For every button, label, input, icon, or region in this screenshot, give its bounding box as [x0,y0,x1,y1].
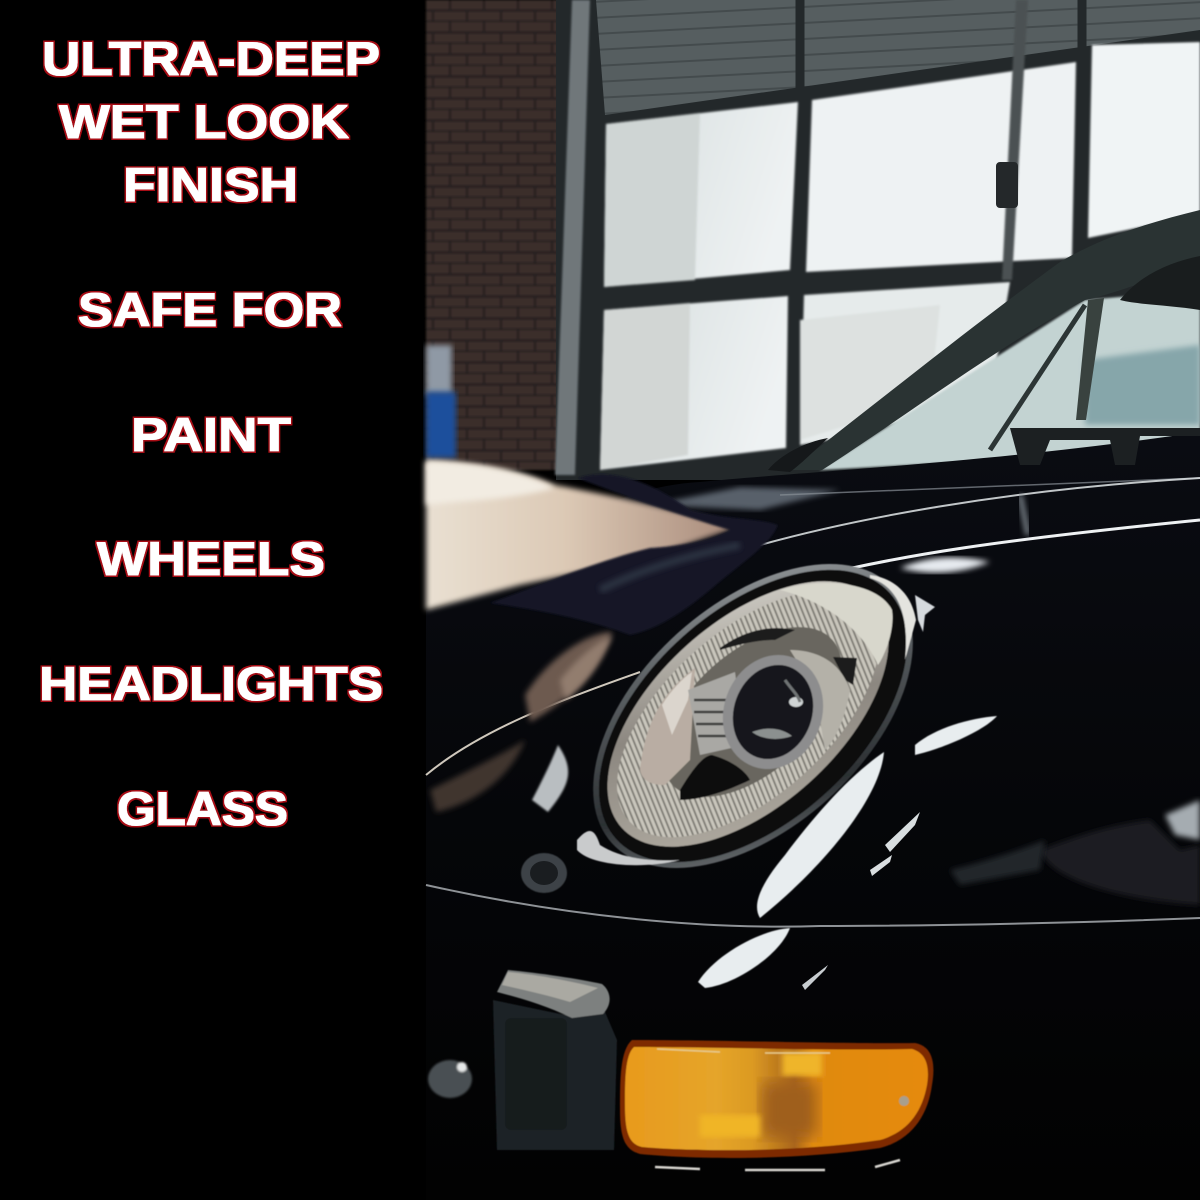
photo: windshield and roof [768,210,1200,472]
brick wall [426,0,566,470]
side marker round cap [521,853,567,893]
dark wedges [720,628,795,650]
dark recess under lens [680,755,750,800]
icon: headlight [537,506,969,926]
heading: ultra-deep wet look finish [42,32,380,211]
text: paint: PAINT [131,408,291,461]
large white streak [757,752,884,918]
left chrome [640,668,695,785]
projector lens [707,641,839,783]
photo: paint reflections [426,478,1200,990]
door mirror base [768,438,828,472]
photo: garage background [426,0,1200,480]
vertical pole [1002,0,1028,280]
heading: ultra-deep wet look finish: ULTRA-DEEP [42,32,380,85]
bright upper reflector band [780,583,893,665]
garage door frame [556,0,1200,480]
hand [426,460,735,610]
text: glass: GLASS [117,782,288,835]
panel: black text column [0,0,426,1200]
text: headlights: HEADLIGHTS [39,657,383,710]
text: wheels: WHEELS [97,532,325,585]
icon: bumper guard [493,970,617,1150]
blue equipment at wall [426,345,452,395]
text: safe for: SAFE FOR [78,283,342,336]
heading: ultra-deep wet look finish: WET LOOK [59,95,349,148]
bezel glints [870,575,916,660]
microfiber towel [490,475,778,635]
upper door dividers [800,0,1082,92]
window panes [600,42,1200,470]
photo: hand with applicator [426,460,778,635]
icon: small round fog lamp [428,1060,472,1098]
photo: black car body [426,432,1200,1200]
reflector stripes [574,546,922,882]
upper door slats [596,0,1200,115]
wiper arm [1010,428,1200,465]
heading: ultra-deep wet look finish: FINISH [123,158,298,211]
inner housing [632,595,872,829]
icon: amber turn signal [620,1040,933,1170]
